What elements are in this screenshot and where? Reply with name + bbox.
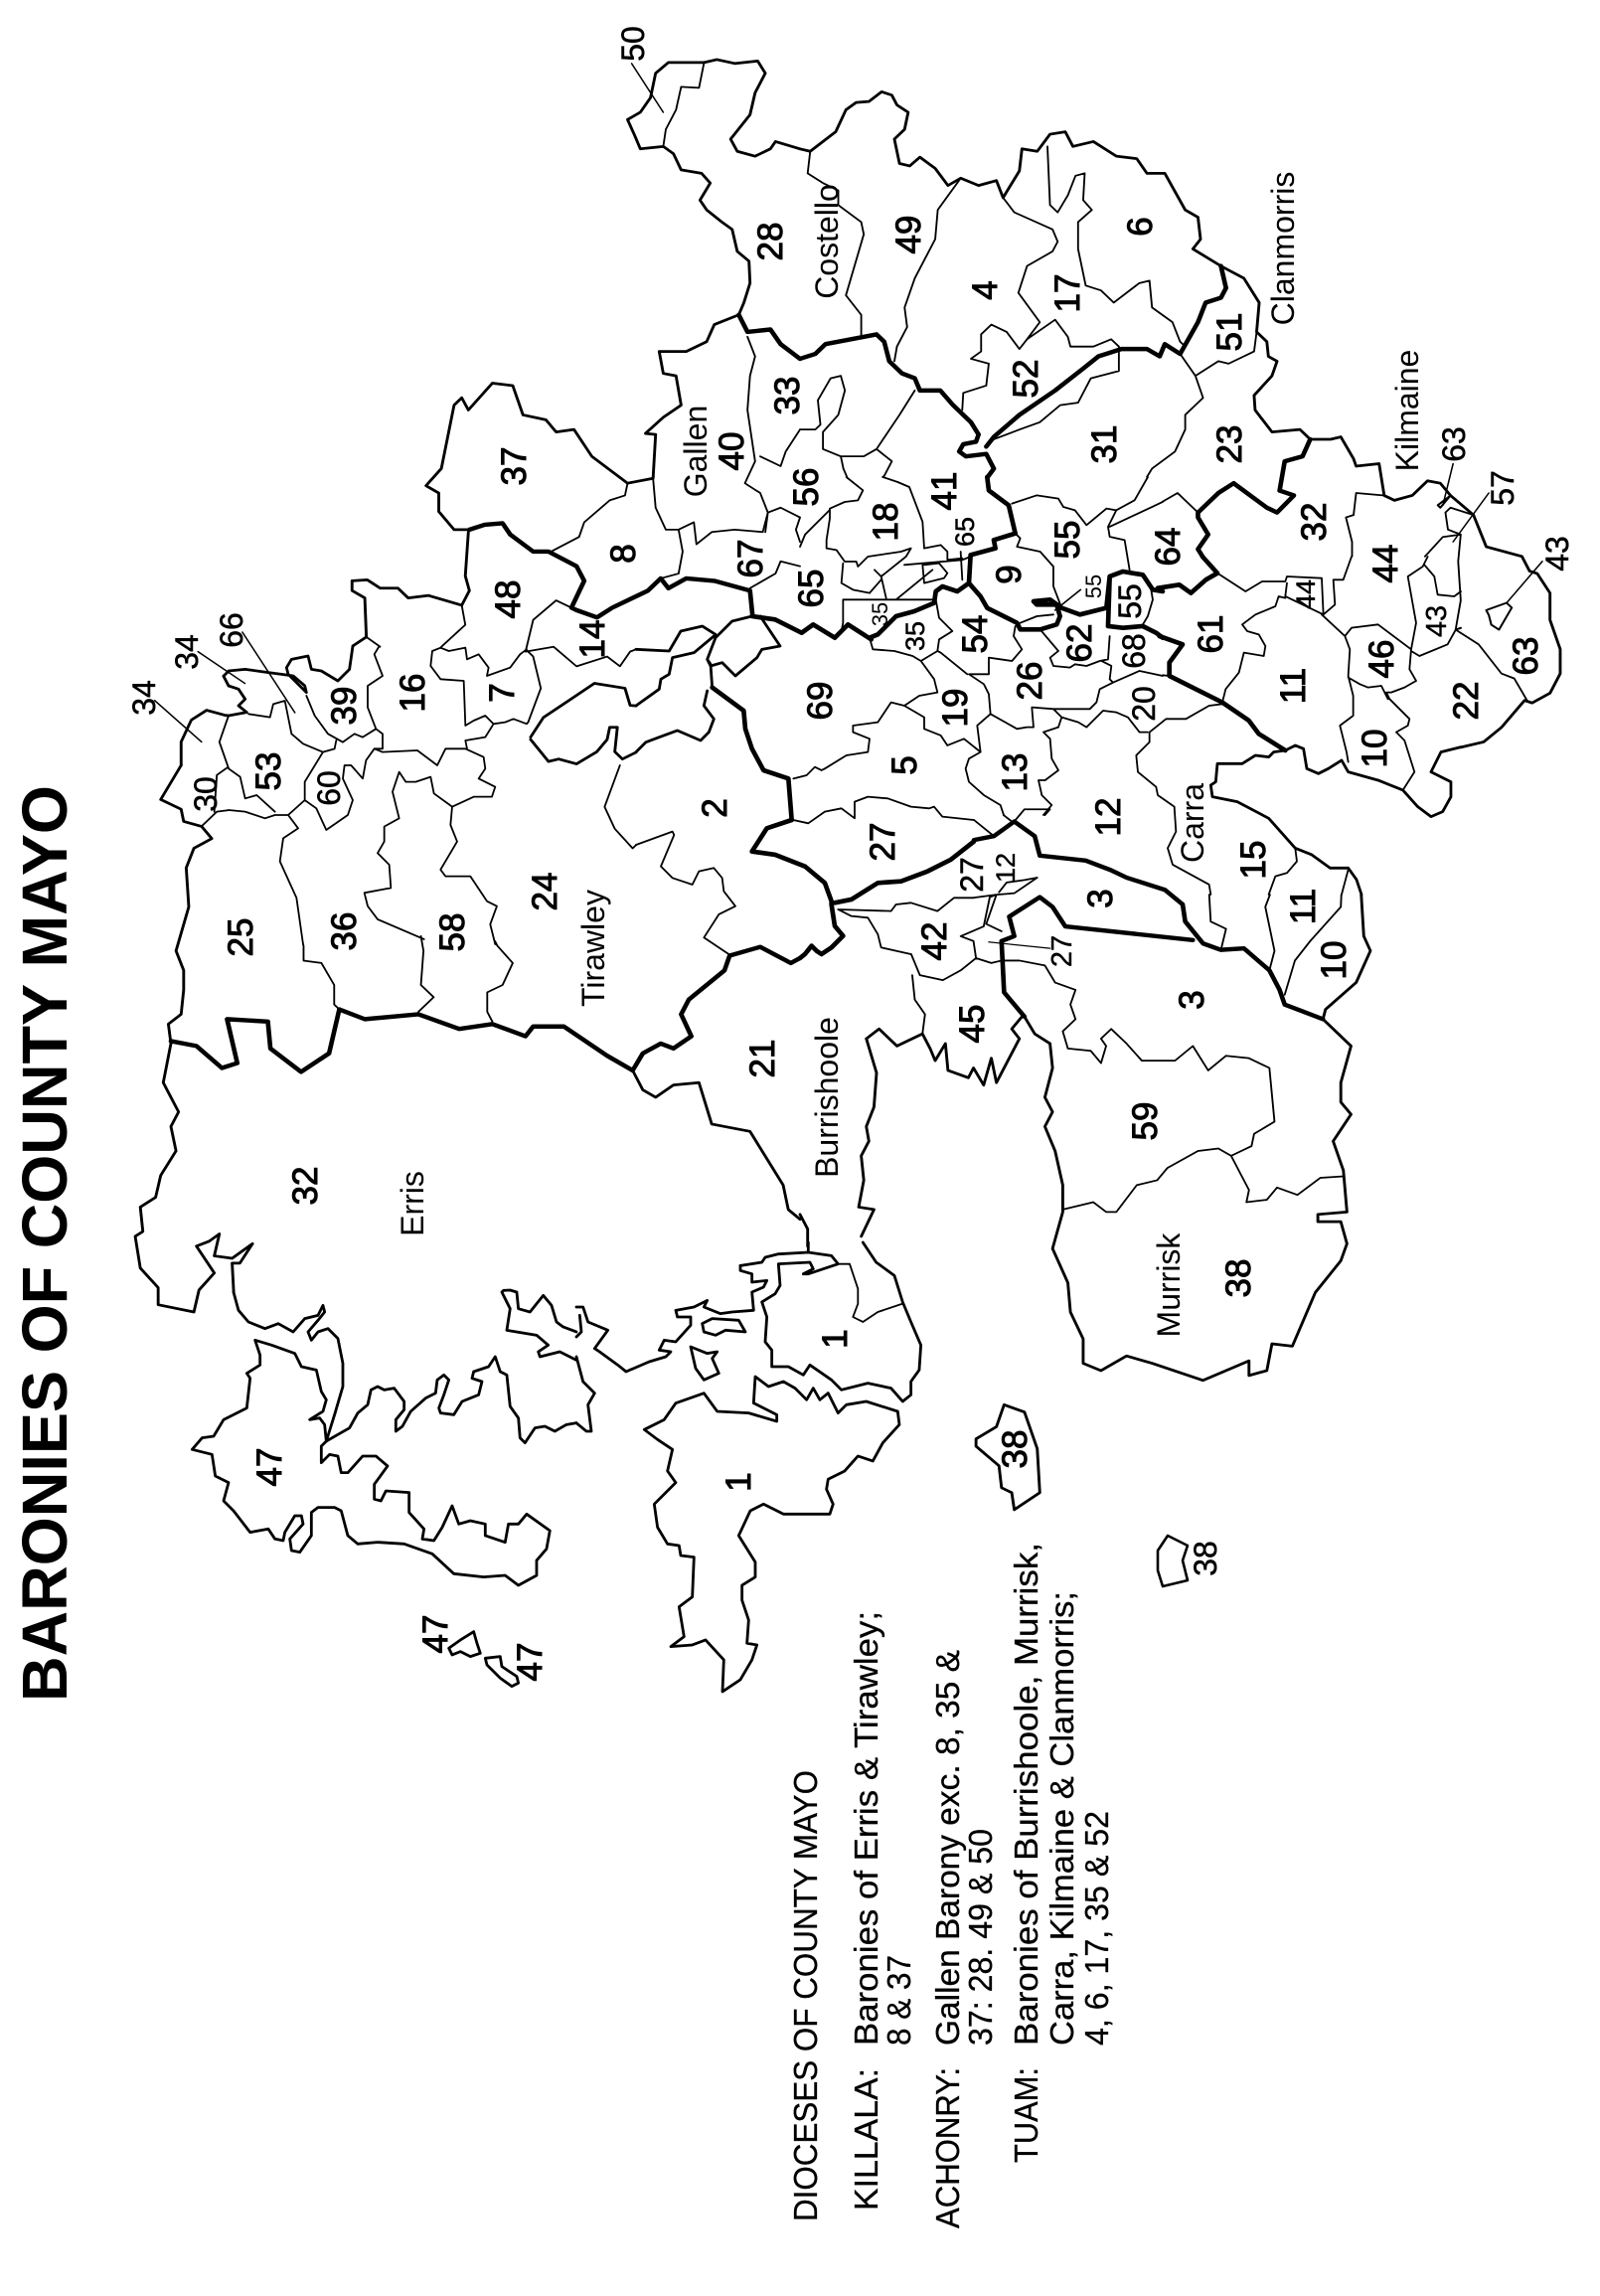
barony numbers: 49: [889, 216, 928, 253]
barony names: Burrishoole: [809, 1017, 845, 1178]
barony numbers: 15: [1234, 841, 1273, 879]
leader-line barony numbers: [126, 26, 1575, 1576]
barony numbers: 10: [1315, 941, 1354, 979]
barony numbers: 5: [885, 755, 924, 775]
barony names: [395, 172, 1425, 1337]
leader lines: north-west: [155, 64, 663, 741]
small barony numbers: 44: [1291, 579, 1321, 609]
legend: dioceses of County Mayo: DIOCESES OF COUNTY MAYO: [787, 1770, 824, 2221]
legend: dioceses of County Mayo: Baronies of Erris & Tirawley;: [848, 1611, 884, 2046]
barony names: Costello: [809, 184, 845, 299]
leader line: 27: [989, 942, 1050, 948]
barony numbers: 7: [483, 683, 522, 703]
barony names: Erris: [395, 1171, 430, 1236]
barony names: Murrisk: [1151, 1232, 1187, 1337]
barony numbers: 8: [604, 544, 643, 564]
leader-line barony numbers: 50: [615, 26, 651, 62]
barony names: Gallen: [678, 406, 714, 497]
barony numbers: 14: [573, 620, 612, 658]
leader-line barony numbers: 55: [1112, 583, 1148, 619]
barony numbers: 4: [966, 280, 1005, 300]
barony numbers: 24: [526, 873, 564, 910]
leader-line barony numbers: 57: [1485, 470, 1520, 506]
small barony numbers: 35: [900, 621, 930, 651]
small barony numbers: 12: [991, 853, 1021, 883]
barony numbers: 38: [996, 1430, 1035, 1468]
barony numbers: 1: [816, 1329, 855, 1349]
legend: dioceses of County Mayo: ACHONRY:: [929, 2067, 966, 2228]
barony numbers: 65: [792, 570, 831, 607]
barony numbers: 31: [1085, 425, 1124, 463]
barony numbers: 19: [936, 689, 975, 727]
barony numbers: 2: [696, 798, 734, 818]
legend: dioceses of County Mayo: 4, 6, 17, 35 & 52: [1078, 1811, 1115, 2046]
barony numbers: 44: [1366, 545, 1405, 582]
map: north-east boundaries: [800, 91, 1560, 747]
legend: dioceses of County Mayo: Baronies of Burrishoole, Murrisk,: [1008, 1543, 1044, 2046]
barony numbers: 11: [1284, 889, 1323, 924]
legend: dioceses of County Mayo: [787, 1543, 1115, 2228]
tiny barony numbers: 35: [868, 602, 892, 626]
barony names: Clanmorris: [1265, 172, 1301, 325]
small lake shapes: [1438, 495, 1512, 630]
map: Kilmaine and Carra baronies: [1136, 557, 1461, 895]
barony numbers: 1: [720, 1472, 758, 1492]
barony numbers: 10: [1356, 730, 1394, 767]
barony numbers: 16: [394, 674, 432, 712]
barony numbers: 58: [433, 913, 472, 951]
barony numbers: 6: [1121, 217, 1160, 237]
barony numbers: 3: [1081, 889, 1120, 908]
barony numbers: 53: [249, 752, 288, 790]
title: BARONIES OF COUNTY MAYO: [9, 785, 80, 1702]
barony numbers: 9: [990, 565, 1029, 584]
barony numbers: 59: [1126, 1102, 1165, 1140]
barony numbers: 18: [867, 503, 905, 541]
barony numbers: 41: [925, 472, 964, 510]
barony numbers: 37: [495, 447, 534, 485]
barony numbers: 45: [953, 1005, 992, 1043]
small barony numbers: [900, 517, 1453, 967]
map: central baronies around 9, 54 and 62: [825, 477, 1163, 815]
barony numbers: 3: [1173, 990, 1211, 1010]
leader lines: north-east: [1055, 464, 1542, 610]
barony numbers: 64: [1149, 528, 1188, 566]
small barony numbers: 65: [950, 517, 980, 547]
barony numbers: [222, 216, 1545, 1681]
barony numbers: 48: [489, 580, 528, 618]
barony numbers: 42: [915, 922, 954, 960]
barony numbers: 25: [222, 918, 260, 956]
map: central-east boundaries: [800, 809, 1370, 1510]
barony numbers: 67: [731, 540, 770, 577]
barony numbers: 33: [768, 377, 807, 414]
leader-line barony numbers: 27: [954, 857, 990, 893]
leader-line barony numbers: 66: [214, 612, 249, 648]
barony numbers: 56: [787, 468, 826, 506]
legend: dioceses of County Mayo: 8 & 37: [880, 1955, 917, 2046]
leader-line barony numbers: 38: [1188, 1541, 1223, 1576]
barony numbers: 21: [743, 1040, 782, 1077]
barony numbers: 69: [801, 682, 840, 720]
barony numbers: 32: [1295, 503, 1334, 541]
barony numbers: 52: [1007, 360, 1045, 398]
barony numbers: 63: [1507, 637, 1545, 675]
barony numbers: 46: [1362, 640, 1401, 678]
barony numbers: 51: [1210, 313, 1249, 351]
barony numbers: 55: [1048, 521, 1087, 559]
icon: small island 38: [1158, 1536, 1188, 1586]
barony numbers: 26: [1011, 662, 1049, 700]
leader-line barony numbers: 68: [1116, 633, 1152, 669]
legend: dioceses of County Mayo: TUAM:: [1008, 2067, 1044, 2163]
map: north-west boundaries: [155, 60, 800, 768]
barony numbers: 36: [325, 912, 364, 950]
leader-line barony numbers: 20: [1126, 686, 1162, 722]
map: north Tirawley baronies: [229, 646, 527, 944]
leader-line barony numbers: 34: [126, 680, 162, 716]
barony numbers: 47: [511, 1643, 550, 1681]
barony numbers: 47: [250, 1448, 289, 1486]
leader-line barony numbers: 30: [188, 776, 224, 812]
barony numbers: 11: [1274, 668, 1313, 704]
barony numbers: 40: [713, 432, 751, 470]
barony numbers: 13: [996, 753, 1035, 791]
leader-line barony numbers: 63: [1436, 426, 1472, 462]
barony numbers: 61: [1192, 615, 1230, 653]
map: Achill and Erris south coast: [192, 1290, 576, 1687]
barony numbers: 47: [416, 1615, 455, 1653]
leader-line barony numbers: 60: [311, 770, 347, 806]
barony numbers: 22: [1447, 682, 1486, 720]
legend: dioceses of County Mayo: Gallen Barony exc. 8, 35 &: [929, 1650, 966, 2046]
barony numbers: 54: [956, 615, 995, 653]
leader-line barony numbers: 43: [1539, 536, 1575, 572]
tiny barony numbers: 55: [1081, 574, 1106, 598]
tiny barony numbers: [868, 574, 1106, 626]
barony numbers: 28: [751, 223, 790, 260]
legend: dioceses of County Mayo: KILLALA:: [848, 2068, 884, 2211]
map: Burrishoole islands and Corraun: [576, 1242, 921, 1692]
barony numbers: 32: [286, 1167, 325, 1205]
barony numbers: 39: [325, 687, 364, 725]
barony names: Carra: [1175, 783, 1210, 863]
barony numbers: 12: [1089, 798, 1128, 836]
barony numbers: 23: [1210, 425, 1249, 463]
barony numbers: 17: [1048, 274, 1087, 312]
barony numbers: 27: [864, 823, 902, 861]
barony numbers: 62: [1060, 624, 1099, 662]
barony names: Tirawley: [575, 890, 611, 1007]
legend: dioceses of County Mayo: Carra, Kilmaine & Clanmorris;: [1043, 1591, 1080, 2046]
barony names: Kilmaine: [1389, 350, 1425, 471]
barony numbers: 38: [1219, 1259, 1258, 1297]
map: central Tirawley and Carra junction: [636, 616, 974, 958]
legend: dioceses of County Mayo: 37: 28. 49 & 50: [962, 1829, 999, 2046]
map: central-west boundaries: [135, 765, 800, 1312]
small barony numbers: 43: [1421, 605, 1453, 637]
small barony numbers: 27: [1046, 935, 1078, 967]
leader-line barony numbers: 34: [169, 634, 205, 670]
